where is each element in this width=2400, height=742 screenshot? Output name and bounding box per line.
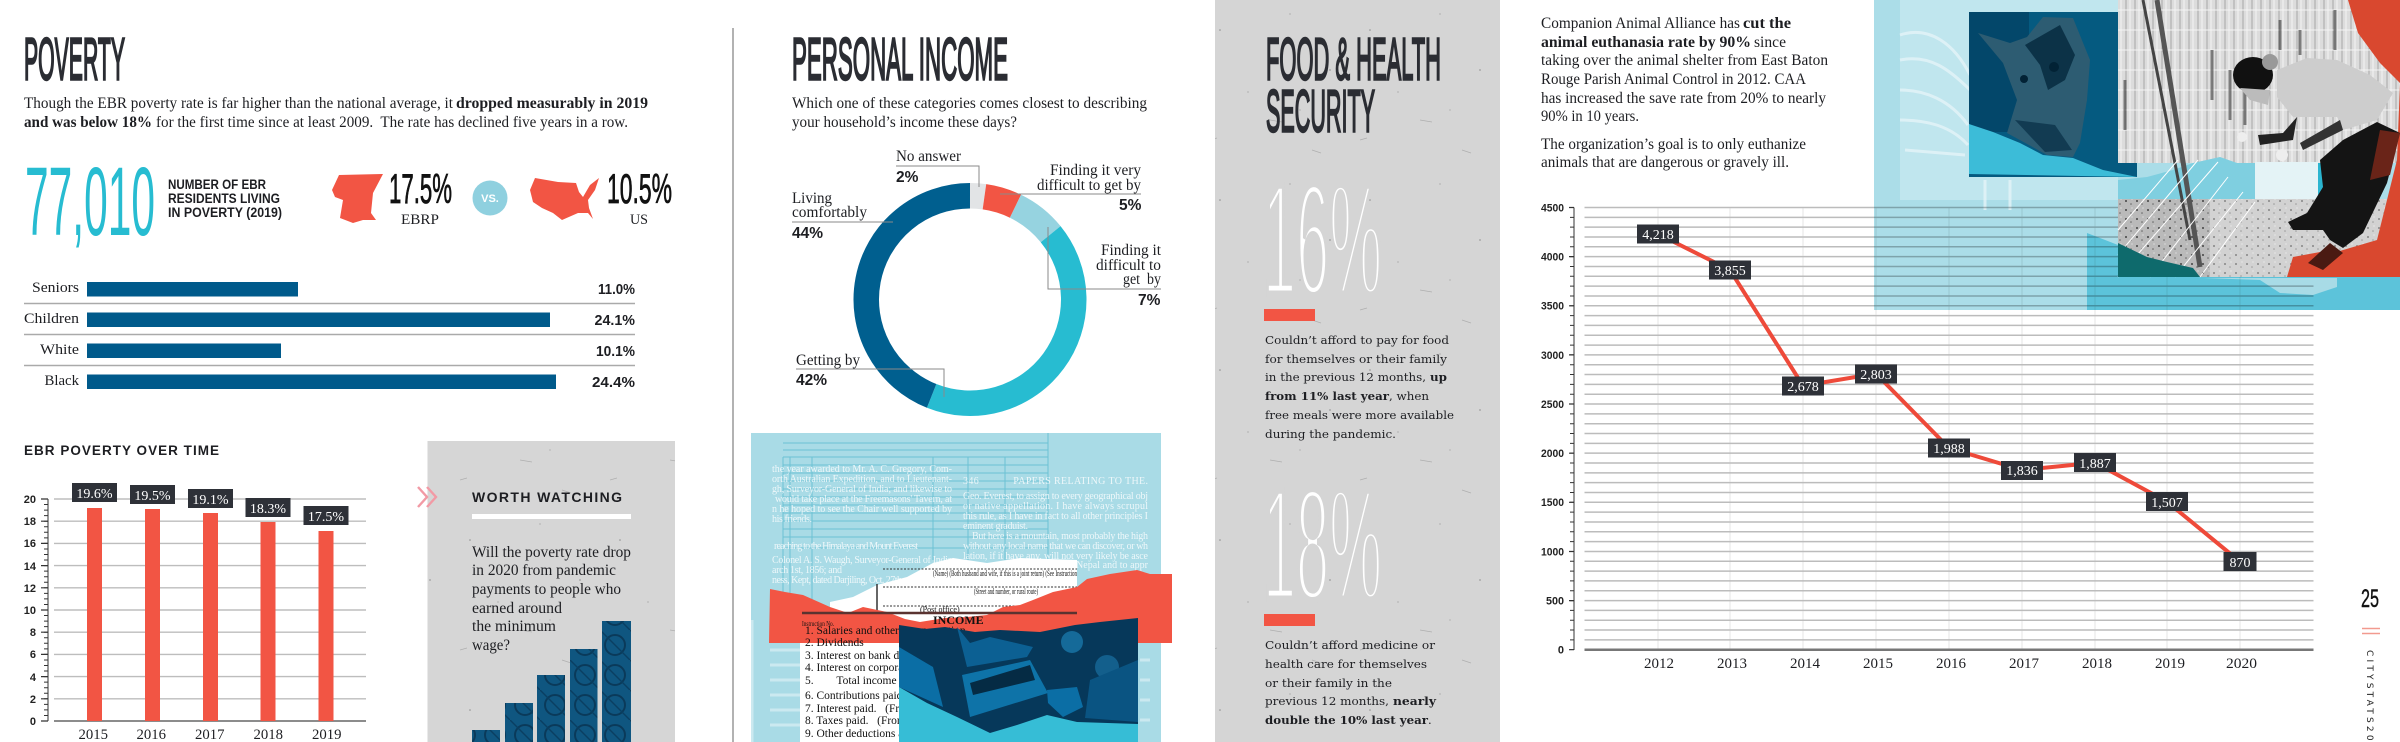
intro text: income: your household’s income these days? — [792, 114, 1017, 131]
panel: poverty — [24, 26, 675, 742]
text: health insecurity: double the 10% last year — [1265, 713, 1429, 727]
form header lines: (Street and number, or rural route) — [974, 587, 1038, 596]
line chart: euthanasia by year — [1541, 202, 2314, 672]
text: companion animal alliance — [1541, 15, 1828, 171]
label: no answer — [896, 148, 962, 186]
badge: vs — [472, 180, 508, 216]
y axis: 4500 — [1541, 202, 1564, 214]
old printed text: Nepal and to appr — [1076, 560, 1149, 571]
teal torn layer — [2087, 233, 2400, 310]
panel: personal income: PERSONAL INCOME — [792, 26, 1008, 92]
old printed text — [752, 464, 1150, 742]
heading: EBR poverty over time: EBR POVERTY OVER TIME — [24, 443, 219, 458]
old printed text: reaching to the Himalaya and Mount Everest — [774, 541, 918, 552]
old printed text: his friends. — [772, 514, 812, 525]
bar chart: EBR poverty over time: 19.1% — [192, 493, 229, 508]
text: question: payments to people who — [472, 581, 621, 598]
panel: food and health security: 18% — [1263, 457, 1382, 633]
text: health insecurity: . — [1428, 713, 1432, 727]
old printed text: lation, if it have any, will not very likely be asce — [963, 551, 1149, 562]
chart: rising currency bars — [472, 621, 631, 742]
icon: EBR parish map — [332, 174, 383, 223]
label: living comfortably: 44% — [792, 225, 823, 242]
text: companion animal alliance: Rouge Parish Animal Control in 2012. CAA — [1541, 71, 1806, 88]
panel: personal income — [751, 26, 1172, 742]
data labels: 1,887 — [2079, 457, 2111, 472]
old printed text: would take place at the Freemasons' Tavern, at — [775, 494, 952, 505]
text: question: wage? — [472, 637, 510, 654]
blue torn strip — [2118, 157, 2255, 199]
intro text: poverty — [24, 95, 648, 131]
worker figure — [2233, 54, 2400, 270]
label: getting by: Getting by — [796, 352, 860, 369]
label: getting by — [796, 352, 860, 389]
text: companion animal alliance: animal euthanasia rate by 90% — [1541, 34, 1751, 51]
x axis years: 2015 — [1863, 656, 1893, 672]
label: finding it very difficult: 5% — [1119, 197, 1142, 214]
old printed text: n he hoped to see the Chair well supported by — [772, 504, 952, 515]
text: food insecurity: from 11% last year — [1265, 389, 1390, 403]
text: companion animal alliance: has increased the save rate from 20% to nearly — [1541, 90, 1826, 107]
collage: tax forms and typewriter — [751, 433, 1172, 742]
form income list: Instruction No. — [802, 620, 834, 628]
badge: vs: VS. — [481, 193, 499, 205]
bar chart: poverty by group: Children — [24, 311, 80, 327]
old printed text: gh, Surveyor-General of India; and likewise to — [772, 484, 952, 495]
icon: US map — [530, 178, 599, 220]
accent lines — [2362, 628, 2380, 634]
bar chart: poverty by group: 11.0% — [598, 281, 635, 298]
label: no answer: No answer — [896, 148, 962, 165]
text: health insecurity: or their family in the — [1265, 676, 1392, 690]
bar chart: EBR poverty over time: 4 — [30, 672, 37, 684]
label: living comfortably: comfortably — [792, 204, 867, 221]
intro text: poverty: for the first time since at least 2009. The rate has declined five years in a row. — [156, 114, 628, 131]
x axis years: 2014 — [1790, 656, 1820, 672]
text: health insecurity — [1265, 638, 1436, 727]
x axis years: 2016 — [1936, 656, 1966, 672]
bar chart: poverty by group: 24.1% — [594, 312, 635, 329]
label: finding it difficult: Finding it — [1101, 242, 1162, 259]
label: finding it difficult: 7% — [1138, 292, 1161, 309]
old printed text: the year awarded to Mr. A. C. Gregory, Com- — [772, 464, 952, 475]
y axis: 3000 — [1541, 350, 1564, 362]
data labels: 1,507 — [2151, 496, 2183, 511]
text: question — [472, 544, 631, 654]
old printed text: arch 1st, 1856; and — [772, 565, 842, 576]
stat: US 10.5% — [607, 165, 672, 228]
data labels — [1637, 224, 2256, 571]
bar chart: poverty by group: 24.4% — [592, 374, 635, 391]
caption: residents in poverty: NUMBER OF EBR — [168, 177, 266, 192]
data labels: 2,803 — [1860, 368, 1892, 383]
old printed text: Colonel A. S. Waugh, Surveyor-General of India — [772, 555, 953, 566]
form income list: 7. Interest paid. (From Schedule — [805, 703, 959, 715]
bar chart: EBR poverty over time: 12 — [24, 583, 36, 595]
old printed text: this rule, as I have in fact to all other principles I — [963, 511, 1148, 522]
form income list: 4. Interest on corporation bonds — [805, 662, 952, 674]
label: finding it very difficult — [1037, 162, 1142, 214]
text: companion animal alliance: The organization’s goal is to only euthanize — [1541, 136, 1806, 153]
bar chart: EBR poverty over time: 17.5% — [308, 510, 344, 525]
printed marks — [2125, 10, 2335, 130]
x axis years: 2013 — [1717, 656, 1747, 672]
old printed text: 346 PAPERS RELATING TO THE. — [963, 476, 1148, 487]
label: finding it difficult: difficult to — [1096, 257, 1161, 274]
x axis years: 2018 — [2082, 656, 2112, 672]
panel: poverty: POVERTY — [24, 26, 125, 92]
divider between sections — [732, 28, 734, 742]
bar chart: EBR poverty over time: 10 — [24, 605, 36, 617]
y axis: 2500 — [1541, 399, 1564, 411]
y axis: 2000 — [1541, 448, 1564, 460]
bar chart: EBR poverty over time: 0 — [30, 716, 36, 728]
torn white form — [830, 558, 1077, 625]
text: food insecurity: in the previous 12 months, — [1265, 370, 1426, 384]
form income list: 1. Salaries and other compensation — [805, 625, 966, 637]
form header lines — [877, 569, 1077, 614]
caption: residents in poverty: RESIDENTS LIVING — [168, 191, 280, 206]
title: food and health security — [1266, 26, 1441, 144]
page footer — [2361, 585, 2380, 742]
bar chart: EBR poverty over time: 16 — [24, 538, 36, 550]
heading: worth watching: WORTH WATCHING — [472, 489, 622, 505]
x axis years — [1644, 656, 2257, 672]
intro text: income — [792, 95, 1147, 131]
form income list: 9. Other deductions authorized — [805, 728, 947, 740]
stat: EBRP 17.5%: 17.5% — [389, 165, 452, 212]
gate bars — [2157, 0, 2200, 267]
text: question: the minimum — [472, 618, 557, 635]
bar chart: poverty by group: White — [40, 342, 79, 358]
text: question: earned around — [472, 600, 562, 617]
page number: 25 — [2361, 585, 2379, 613]
text: food insecurity: for themselves or their family — [1265, 352, 1448, 366]
text: health insecurity: previous 12 months, — [1265, 694, 1389, 708]
bar chart: poverty by group: 10.1% — [596, 343, 635, 360]
old printed text: eminent graduist. — [963, 521, 1028, 532]
label: living comfortably: Living — [792, 190, 832, 207]
text: FOOD & HEALTH — [1266, 26, 1441, 92]
label: finding it very difficult: Finding it very — [1050, 162, 1141, 179]
bar chart: poverty by group — [24, 280, 635, 391]
text: companion animal alliance: 90% in 10 years. — [1541, 108, 1639, 125]
accent bar — [1264, 309, 1315, 321]
data labels: 870 — [2230, 556, 2250, 571]
old printed text: ness, Kept, dated Darjiling, Oct. 27th — [772, 575, 902, 586]
text: health insecurity: nearly — [1393, 694, 1436, 708]
stat: EBRP 17.5% — [389, 165, 452, 228]
donut chart: household income — [866, 196, 1074, 403]
panel: food and health security — [1215, 0, 1500, 742]
red backdrop — [2287, 0, 2400, 277]
data labels: 1,836 — [2006, 464, 2038, 479]
label: finding it very difficult: difficult to get by — [1037, 177, 1141, 194]
y axis — [1541, 202, 1574, 656]
title: food and health security: SECURITY — [1266, 78, 1375, 144]
y axis: 4000 — [1541, 252, 1564, 264]
intro text: poverty: Though the EBR poverty rate is far higher than the national average, it — [24, 95, 454, 112]
x axis years: 2012 — [1644, 656, 1674, 672]
data labels: 4,218 — [1642, 228, 1674, 243]
bar chart: EBR poverty over time: 18.3% — [250, 502, 286, 517]
form income list: 5. Total income in items — [805, 675, 937, 687]
form header lines: (Name) (Both husband and wife, if this is a joint return) (See Instruction — [933, 569, 1077, 578]
bar chart: EBR poverty over time: 8 — [30, 627, 36, 639]
x axis years: 2019 — [2155, 656, 2185, 672]
text: food insecurity: , when — [1389, 389, 1430, 403]
stat: EBRP 17.5%: EBRP — [401, 212, 439, 228]
panel: poverty: 77,010 — [25, 147, 155, 256]
caption: residents in poverty: IN POVERTY (2019) — [168, 205, 282, 220]
wire fence — [2118, 160, 2255, 277]
panel: worth watching — [418, 441, 675, 742]
data labels: 2,678 — [1787, 380, 1819, 395]
data labels: 1,988 — [1933, 442, 1965, 457]
label: living comfortably — [792, 190, 867, 242]
bar chart: EBR poverty over time: 2 — [30, 694, 36, 706]
old printed text: But here is a mountain, most probably the high — [972, 531, 1148, 542]
bar chart: poverty by group: Black — [44, 373, 79, 389]
form income list: 3. Interest on bank deposits, notes — [805, 650, 962, 662]
y axis: 500 — [1546, 596, 1564, 608]
bar chart: EBR poverty over time: 14 — [24, 561, 37, 573]
y axis: 1500 — [1541, 497, 1564, 509]
text: health insecurity: Couldn’t afford medicine or — [1265, 638, 1436, 652]
data line — [1658, 234, 2240, 562]
intro text: income: Which one of these categories comes closest to describing — [792, 95, 1147, 112]
caption: residents in poverty — [168, 177, 282, 220]
leader lines — [792, 166, 1161, 397]
stat: US 10.5%: US — [630, 212, 648, 228]
text: food insecurity: free meals were more available — [1265, 408, 1454, 422]
y axis: 3500 — [1541, 300, 1564, 312]
panel: food and health security: 16% — [1263, 152, 1382, 328]
x axis years: 2017 — [2009, 656, 2040, 672]
text: companion animal alliance: animals that are dangerous or gravely ill. — [1541, 154, 1789, 171]
bar chart: EBR poverty over time: 19.6% — [76, 487, 113, 502]
accent bar — [1264, 614, 1315, 626]
old printed text: or native appellation. I have always scrupul — [963, 501, 1148, 512]
text: food insecurity — [1265, 333, 1454, 441]
y axis: 1000 — [1541, 546, 1564, 558]
kitten photo — [1969, 12, 2137, 177]
photo: typewriter family — [899, 618, 1138, 742]
intro text: poverty: dropped measurably in 2019 — [456, 95, 648, 112]
pale paper layer — [1900, 0, 2118, 200]
bar chart: EBR poverty over time — [24, 483, 366, 742]
form income list: 8. Taxes paid. (From Schedule — [805, 715, 951, 727]
text: companion animal alliance: Companion Animal Alliance has — [1541, 15, 1740, 32]
data labels: 3,855 — [1714, 264, 1746, 279]
form income list: INCOME — [933, 613, 984, 627]
x axis years: 2020 — [2226, 656, 2257, 672]
bar chart: EBR poverty over time: 6 — [30, 649, 36, 661]
label: no answer: 2% — [896, 169, 919, 186]
bar chart: EBR poverty over time: 19.5% — [134, 489, 171, 504]
label: finding it difficult: get by — [1123, 271, 1161, 288]
bar chart: poverty by group: Seniors — [32, 280, 79, 296]
stat: US 10.5%: 10.5% — [607, 165, 672, 212]
text: companion animal alliance: taking over the animal shelter from East Baton — [1541, 52, 1828, 69]
text: food insecurity: up — [1430, 370, 1447, 384]
ledger grid — [783, 433, 1048, 600]
bar chart: EBR poverty over time: 20 — [24, 494, 36, 506]
text: companion animal alliance: cut the — [1743, 15, 1791, 32]
old printed text: Geo. Everest, to assign to every geographical obj — [963, 491, 1148, 502]
y axis: 0 — [1558, 644, 1564, 656]
text: companion animal alliance: since — [1754, 34, 1786, 51]
form income list: 2. Dividends — [805, 637, 864, 649]
torn red paper — [769, 570, 1172, 643]
icon: chevrons — [418, 487, 436, 507]
text: question: in 2020 from pandemic — [472, 562, 616, 579]
text: question: Will the poverty rate drop — [472, 544, 631, 561]
form income list — [802, 613, 1077, 740]
text: food insecurity: during the pandemic. — [1265, 427, 1396, 441]
label: getting by: 42% — [796, 372, 827, 389]
old printed text: without any local name that we can discover, or wh — [963, 541, 1148, 552]
collage: blue background and kitten — [1874, 0, 2400, 310]
old printed text: orth Australian Expedition, and to Lieutenant- — [772, 474, 952, 485]
teal corner — [2118, 243, 2200, 277]
intro text: poverty: and was below 18% — [24, 114, 152, 131]
form income list: 6. Contributions paid. (From Sch — [805, 690, 963, 702]
label: finding it difficult — [1096, 242, 1162, 309]
faded white sketch — [1900, 32, 2010, 210]
form header lines: (Post office) — [920, 605, 960, 614]
gridlines — [1658, 207, 2240, 650]
text: food insecurity: Couldn’t afford to pay for food — [1265, 333, 1450, 347]
bar chart: EBR poverty over time: 18 — [24, 516, 36, 528]
photo: shelter worker — [2118, 0, 2400, 277]
text: health insecurity: health care for themselves — [1265, 657, 1427, 671]
